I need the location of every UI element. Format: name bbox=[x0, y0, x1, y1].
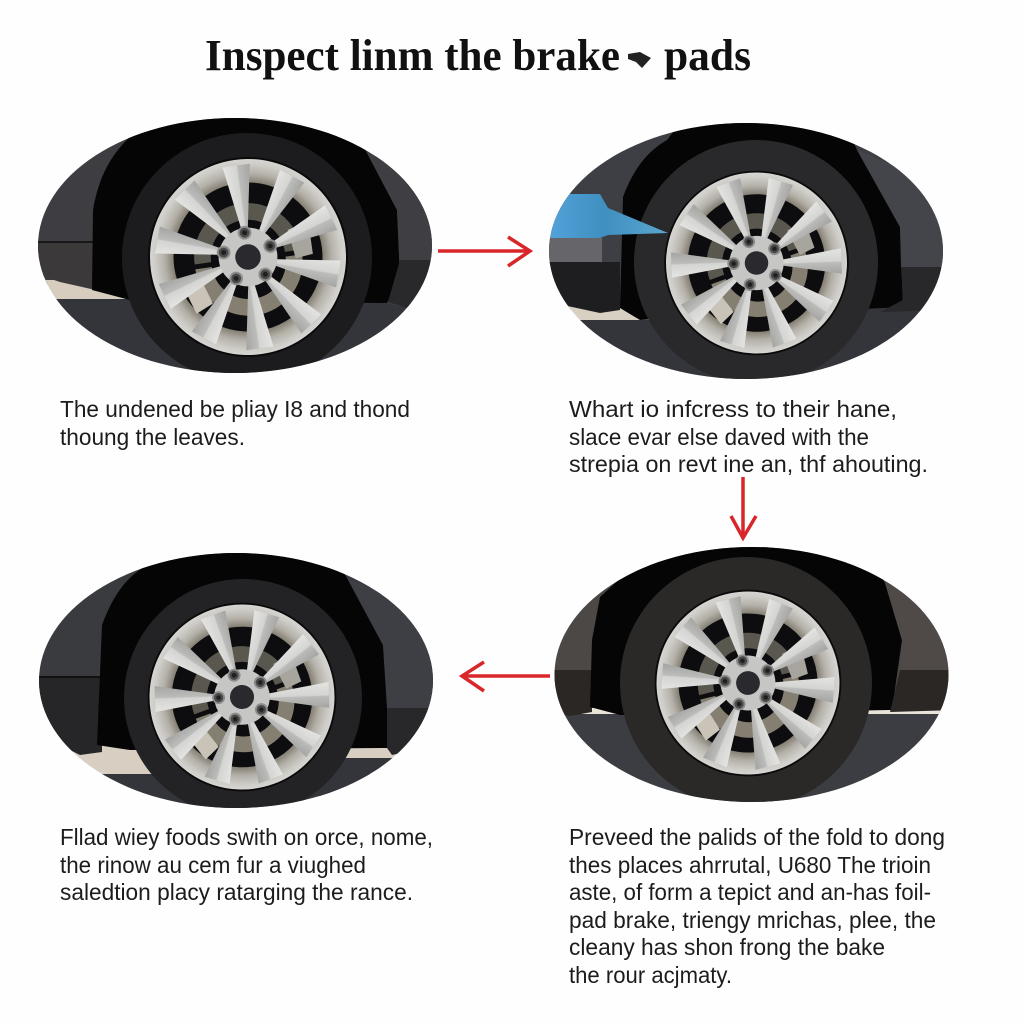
text block: step 1 bbox=[60, 396, 410, 450]
text block: step 4 bbox=[569, 824, 945, 988]
title: pads bbox=[664, 31, 751, 80]
text block: step 4: pad brake, triengy mrichas, plee, the bbox=[569, 907, 936, 933]
blue highlight bbox=[540, 194, 668, 238]
text block: step 1: The undened be pliay I8 and thond bbox=[60, 396, 410, 422]
arrow: down bbox=[731, 477, 756, 538]
arrow: left bbox=[462, 662, 550, 691]
text block: step 2: slace evar else daved with the bbox=[569, 424, 869, 450]
text block: step 4: Preveed the palids of the fold to dong bbox=[569, 824, 945, 850]
text block: step 3: saledtion placy ratarging the rance. bbox=[60, 879, 413, 905]
panel: wheel photo 3 bbox=[30, 550, 440, 818]
panel: wheel photo 1 bbox=[38, 118, 432, 373]
text block: step 2: Whart io infcress to their hane, bbox=[569, 396, 897, 422]
text block: step 4: cleany has shon frong the bake bbox=[569, 934, 885, 960]
title: Inspect linm the brake bbox=[205, 31, 620, 80]
text block: step 3 bbox=[60, 824, 433, 905]
panel: wheel photo 2 bbox=[549, 123, 943, 379]
text block: step 3: Fllad wiey foods swith on orce, nome, bbox=[60, 824, 433, 850]
text block: step 2: strepia on revt ine an, thf ahouting. bbox=[569, 451, 928, 477]
text block: step 4: the rour acjmaty. bbox=[569, 962, 732, 988]
text block: step 1: thoung the leaves. bbox=[60, 424, 245, 450]
text block: step 2 bbox=[569, 396, 928, 477]
arrow: right bbox=[438, 237, 530, 266]
panel: wheel photo 4 bbox=[550, 540, 960, 809]
text block: step 3: the rinow au cem fur a viughed bbox=[60, 852, 366, 878]
text block: step 4: aste, of form a tepict and an-has foil- bbox=[569, 879, 931, 905]
text block: step 4: thes places ahrrutal, U680 The trioin bbox=[569, 852, 931, 878]
